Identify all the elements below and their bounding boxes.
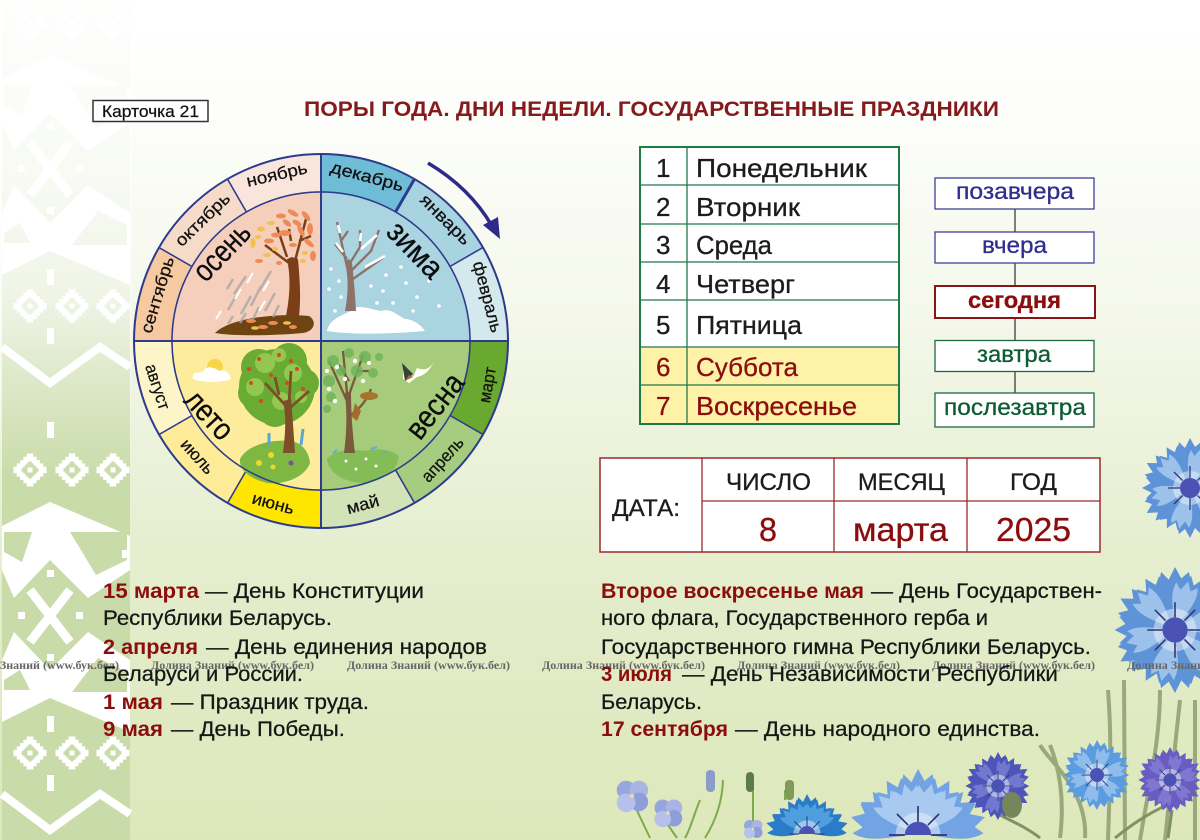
text block: holidays left: — День Победы.: [171, 718, 345, 741]
column: day: 8: [759, 511, 777, 548]
season labels: весна: [398, 365, 472, 446]
watermark: Долина Знаний (www.бук.бел): [151, 660, 314, 672]
box: day before yesterday: позавчера: [956, 178, 1074, 204]
column: day: ЧИСЛО: [726, 469, 811, 496]
month sectors: [134, 154, 508, 528]
month labels: сентябрь: [137, 254, 178, 335]
text block: holidays right: [601, 580, 1102, 741]
row: Thursday: 4: [656, 269, 670, 299]
row: Thursday: [656, 269, 795, 299]
watermark: [0, 660, 1200, 672]
row: Sunday: Воскресенье: [696, 391, 857, 421]
icon: winter tree: [327, 222, 441, 334]
row: Tuesday: 2: [656, 192, 670, 222]
month labels: февраль: [469, 259, 506, 335]
month labels: декабрь: [328, 158, 406, 195]
watermark: Долина Знаний (www.бук.бел): [932, 660, 1095, 672]
arrow: direction of months: [428, 163, 500, 239]
table: days of the week: [640, 147, 899, 424]
text block: holidays left: — День Конституции: [205, 580, 424, 603]
season labels: [177, 214, 472, 447]
season labels: осень: [185, 215, 258, 288]
text block: holidays left: — Праздник труда.: [171, 691, 369, 714]
month labels: май: [344, 491, 381, 518]
text block: holidays right: Государственного гимна Республики Беларусь.: [601, 636, 1091, 659]
column: month: марта: [853, 511, 949, 548]
row: Saturday: Суббота: [696, 352, 799, 382]
row: Friday: Пятница: [696, 310, 803, 340]
row: Wednesday: 3: [656, 230, 670, 260]
box: yesterday: вчера: [982, 232, 1047, 258]
season labels: лето: [177, 382, 241, 447]
text block: holidays right: — День народного единства.: [735, 718, 1040, 741]
text block: holidays left: 15 марта: [103, 580, 199, 603]
title: ПОРЫ ГОДА. ДНИ НЕДЕЛИ. ГОСУДАРСТВЕННЫЕ ПРАЗДНИКИ: [304, 98, 999, 121]
column: year: ГОД: [1010, 469, 1057, 496]
icon: sun and cloud: [193, 359, 231, 382]
text block: holidays left: [103, 580, 487, 741]
box: yesterday: [935, 232, 1094, 263]
icon: stork: [402, 362, 434, 383]
month labels: июль: [177, 435, 218, 478]
row: Sunday: 7: [656, 391, 670, 421]
box: tomorrow: [935, 340, 1094, 372]
date label: ДАТА:: [612, 495, 680, 522]
text block: holidays right: ного флага, Государственного герба и: [601, 607, 988, 630]
month labels: март: [475, 365, 500, 404]
column: month: МЕСЯЦ: [858, 469, 945, 496]
row: Wednesday: Среда: [696, 230, 773, 260]
month labels: [137, 158, 506, 518]
month labels: август: [141, 362, 174, 412]
text block: holidays left: Беларуси и России.: [103, 663, 303, 686]
month labels: апрель: [418, 433, 468, 486]
row: Tuesday: Вторник: [696, 192, 801, 222]
text block: holidays left: — День единения народов: [206, 636, 487, 659]
column: month: [853, 469, 949, 548]
column: year: 2025: [996, 511, 1071, 548]
card label: Карточка 21: [102, 102, 199, 121]
row: Monday: Понедельник: [696, 153, 868, 183]
flowers decoration: [617, 438, 1200, 840]
text block: holidays right: 3 июля: [601, 663, 672, 686]
box: tomorrow: завтра: [977, 341, 1051, 367]
icon: autumn tree: [215, 208, 316, 335]
text block: holidays right: 17 сентября: [601, 718, 728, 741]
season labels: зима: [380, 214, 451, 286]
text block: holidays left: 2 апреля: [103, 636, 198, 659]
month labels: июнь: [250, 489, 296, 518]
box: day after tomorrow: [935, 393, 1094, 427]
icon: summer tree: [238, 343, 319, 483]
box: today: сегодня: [968, 287, 1061, 313]
row: Friday: 5: [656, 310, 670, 340]
row: Monday: 1: [656, 153, 670, 183]
text block: holidays left: 1 мая: [103, 691, 163, 714]
day sequence chain: [935, 178, 1095, 427]
watermark: Долина Знаний (www.бук.бел): [347, 660, 510, 672]
date table: [600, 458, 1100, 552]
seasons wheel: [134, 154, 508, 528]
icon: spring tree: [323, 348, 399, 483]
month labels: ноябрь: [245, 158, 309, 191]
month labels: январь: [416, 190, 475, 249]
text block: holidays right: — День Независимости Республики: [682, 663, 1058, 686]
season quadrants: [172, 192, 470, 490]
text block: holidays left: Республики Беларусь.: [103, 607, 332, 630]
column: year: [996, 469, 1071, 548]
watermark: Долина Знаний (www.бук.бел): [737, 660, 900, 672]
month labels: октябрь: [171, 189, 234, 250]
watermark: Долина Знаний (www.бук.бел): [542, 660, 705, 672]
row: Thursday: Четверг: [696, 269, 795, 299]
box: today: [935, 286, 1095, 318]
row: Tuesday: [656, 192, 801, 222]
decorative national ornament: [0, 0, 131, 840]
structure lines: [134, 154, 508, 528]
text block: holidays right: Второе воскресенье мая: [601, 580, 864, 603]
text block: holidays right: — День Государствен-: [871, 580, 1102, 603]
row: Saturday: 6: [656, 352, 670, 382]
box: day after tomorrow: послезавтра: [944, 394, 1086, 420]
row: Wednesday: [656, 230, 773, 260]
text block: holidays right: Беларусь.: [601, 691, 702, 714]
box: day before yesterday: [935, 178, 1094, 209]
column: day: [726, 469, 811, 548]
text block: holidays left: 9 мая: [103, 718, 163, 741]
